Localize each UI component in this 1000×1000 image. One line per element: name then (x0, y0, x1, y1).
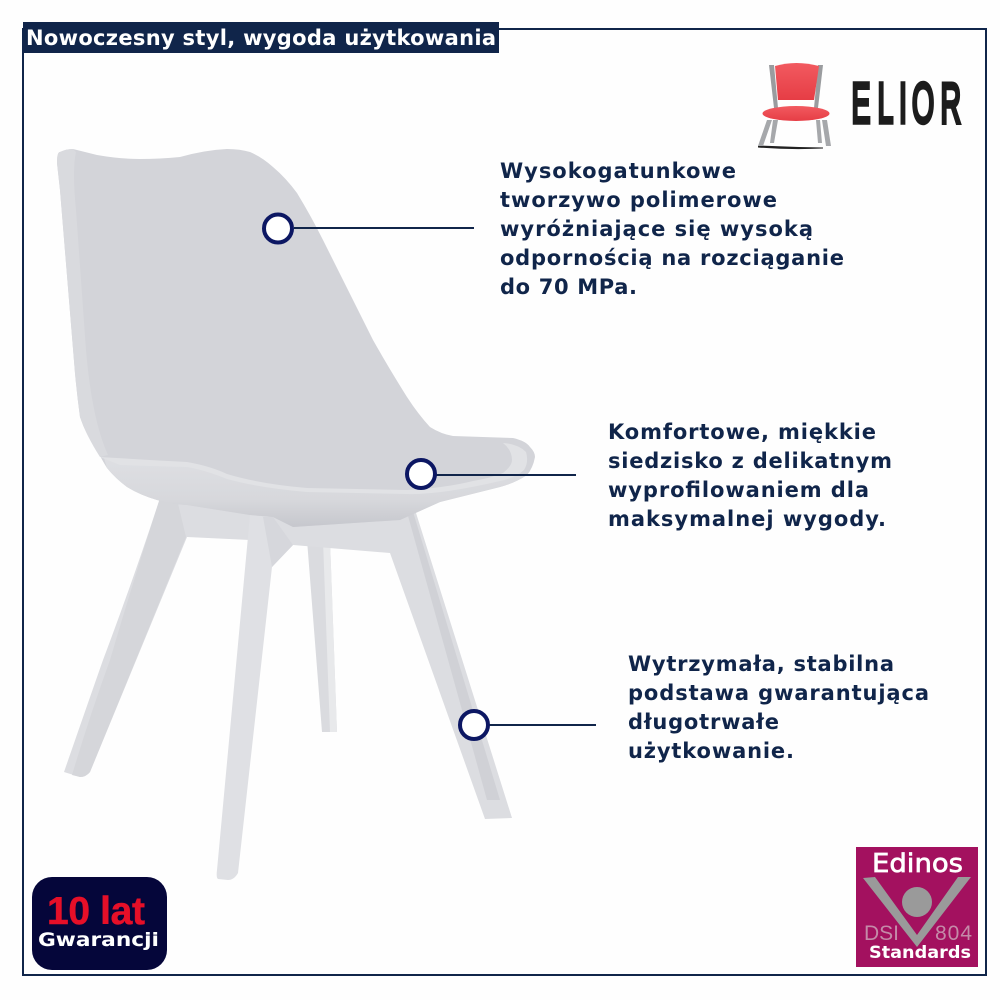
callout: shell: wyróżniające się wysoką (500, 217, 813, 241)
badge: 10 year warranty (32, 877, 167, 970)
badge: 10 year warranty: 10 lat (47, 890, 145, 933)
callout: base: długotrwałe (628, 710, 779, 734)
callout: shell (264, 159, 844, 299)
chair: base with left leg, crossbar and right leg (64, 495, 512, 819)
badge: Edinos standards: Edinos (872, 849, 963, 879)
callout: seat: maksymalnej wygody. (608, 507, 886, 531)
icon: red chair (758, 63, 831, 149)
callout: base: Wytrzymała, stabilna (628, 652, 894, 676)
callout: shell: odpornością na rozciąganie (500, 246, 844, 270)
callout: base (460, 652, 929, 763)
callout: seat: siedzisko z delikatnym (608, 449, 892, 473)
chair photo (57, 149, 535, 880)
callout: seat (407, 420, 892, 531)
badge: Edinos standards: Standards (869, 943, 971, 963)
callout: seat: Komfortowe, miękkie (608, 420, 876, 444)
chair: shell underside (104, 458, 527, 527)
title banner: Nowoczesny styl, wygoda użytkowania (26, 26, 496, 50)
chair: front leg (217, 515, 293, 880)
callout: base: podstawa gwarantująca (628, 681, 929, 705)
badge: Edinos standards: DSI (864, 922, 899, 945)
callout: base: użytkowanie. (628, 739, 794, 763)
badge: 10 year warranty: Gwarancji (38, 929, 159, 951)
badge: Edinos standards (856, 847, 978, 967)
callout: shell: Wysokogatunkowe (500, 159, 736, 183)
chair: back shell and cushion (57, 149, 535, 527)
callout: seat: wyprofilowaniem dla (608, 478, 869, 502)
logo: Elior (758, 63, 961, 149)
wordmark: ELIOR (852, 70, 961, 135)
badge: Edinos standards: 804 (935, 922, 972, 945)
chair: seat lip highlight (100, 443, 527, 494)
callout: shell: do 70 MPa. (500, 275, 637, 299)
callout: shell: tworzywo polimerowe (500, 188, 777, 212)
chair: back leg (307, 540, 337, 732)
chair: shell left rim (57, 149, 108, 457)
